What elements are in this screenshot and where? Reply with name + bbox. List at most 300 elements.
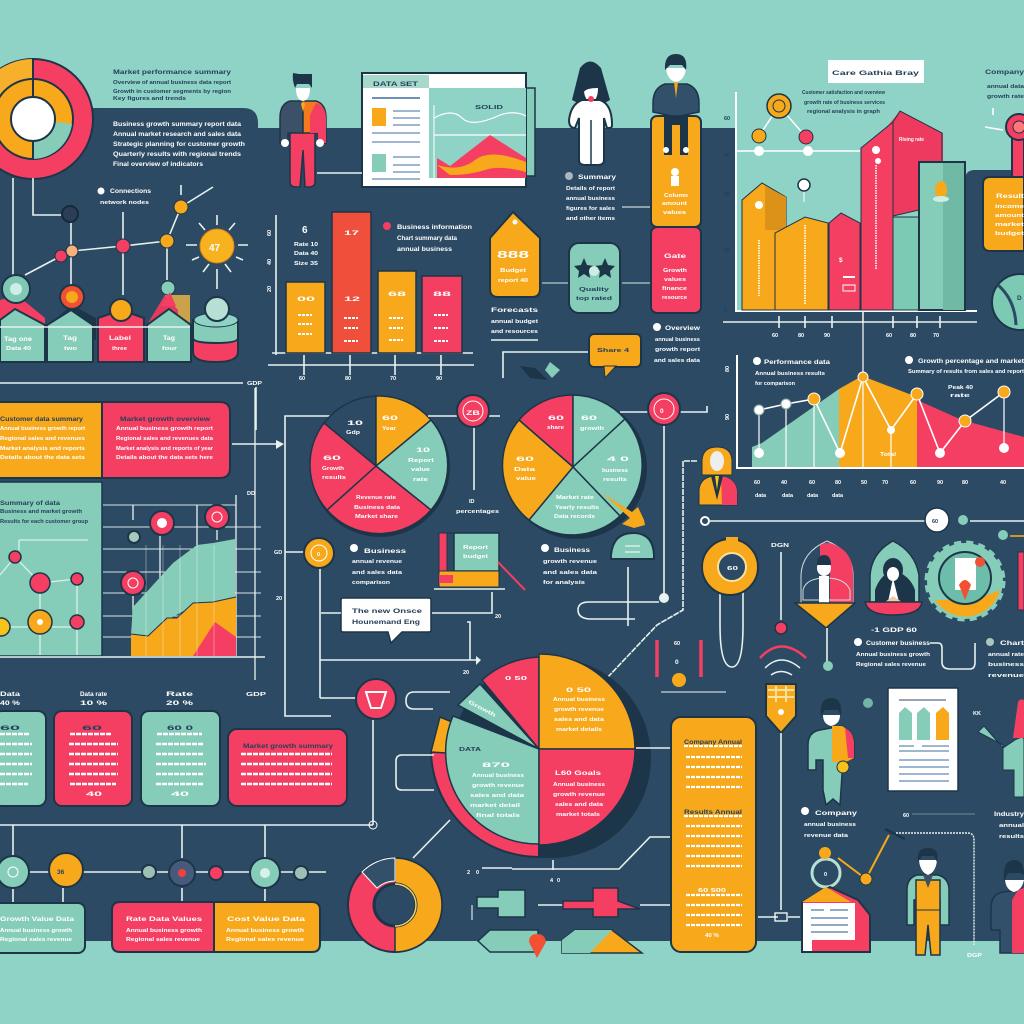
column with seated man: Column (664, 193, 689, 199)
connector and amber node: 20 (463, 670, 469, 676)
cards row: 60 (82, 725, 103, 732)
right top text and pin (985, 69, 1024, 180)
text: person captions: Industry (994, 811, 1024, 818)
cards row: Market growth summary (243, 743, 333, 750)
pink bars with amber figure: 0 (675, 659, 679, 666)
connector: pink badge 1: ZB (466, 410, 480, 417)
text below pie 1 (350, 544, 407, 586)
tag: amber label (490, 212, 540, 297)
text: person captions: annual (999, 823, 1024, 829)
line chart: right: 60 (754, 480, 760, 486)
pie chart 1 (285, 396, 450, 716)
line chart: right: 70 (882, 480, 888, 486)
person: red trousers (280, 73, 326, 187)
pie chart 2: Data records (554, 514, 595, 520)
connector and amber node: 0 (317, 552, 320, 558)
line chart: right: data (807, 493, 819, 499)
panel: bottom mint: Regional sales revenue (0, 937, 72, 943)
pie chart 2: Market rate (556, 495, 594, 501)
banner: amber and pink: Annual business growth report (0, 426, 85, 432)
portrait card 1 (795, 541, 855, 671)
pie chart 2: Yearly results (555, 505, 599, 511)
outline connectors around large pie (396, 748, 670, 884)
area chart with grid: DD (247, 491, 255, 497)
pie chart 2: 4 0 (607, 456, 630, 463)
speech bubble: amber note (503, 334, 641, 380)
amber panel right: income (995, 204, 1024, 210)
text: portrait captions: business (988, 662, 1024, 668)
cards row: 10 % (80, 700, 107, 707)
pie chart 1: value (411, 467, 430, 473)
row of house-shaped cards: Tag (63, 335, 77, 342)
bar chart legend (383, 222, 472, 253)
pink bars with amber figure: 60 (674, 641, 680, 647)
large pie chart: 0 50 (505, 676, 527, 682)
outline connectors around large pie: 20 (467, 870, 479, 876)
text block beside column: Summary (578, 174, 616, 181)
pie chart 2: 60 (548, 415, 565, 422)
bar chart: centre-top: 80 (345, 376, 351, 382)
text: person captions: results (999, 834, 1024, 840)
area chart with grid (0, 388, 265, 680)
bar chart: centre-top: Rate 10 (294, 242, 318, 248)
icon: amber ring with stem: 60 (727, 566, 738, 572)
large pie chart: Annual business (553, 782, 605, 788)
bar chart: centre-top: 20 (267, 286, 273, 292)
right top text and pin: Company (985, 69, 1024, 76)
panel: top-left speech bubble (80, 108, 258, 183)
text below pie 2: growth revenue (543, 559, 597, 565)
line chart: right (725, 322, 1024, 499)
dashed connector (607, 461, 697, 678)
title label: Care Gathia Bray (832, 70, 920, 77)
bar chart: centre-top: 68 (388, 291, 407, 298)
area-bar chart: top right: 60 (724, 116, 730, 122)
bar chart: centre-top: 70 (390, 376, 396, 382)
panel: tall amber: 40 % (705, 933, 719, 939)
bar chart: centre-top: 88 (433, 291, 452, 298)
right top text and pin: growth rate (987, 94, 1024, 100)
line chart: right: 90 (725, 414, 731, 420)
banner: amber and pink: Market growth overview (120, 416, 211, 423)
area-bar chart: top right (723, 92, 977, 339)
panel: top-left speech bubble: Strategic planning for customer growth (113, 141, 245, 148)
person: right edge mint (973, 699, 1024, 797)
panel: bottom mint (0, 903, 85, 953)
column with seated man: amount (662, 201, 687, 207)
text below pie 1: annual revenue (352, 559, 402, 565)
amber panel right (983, 177, 1024, 251)
pie chart 1: 10 (416, 447, 431, 454)
bar chart: centre-top: 00 (297, 296, 316, 303)
line chart legend: Summary of results from sales and report (908, 369, 1024, 375)
cards row: 60 (0, 725, 21, 732)
divider line with label: GDP (247, 381, 262, 387)
heading: top-left text: Overview of annual business data report (113, 80, 231, 86)
line chart: right: 80 (725, 366, 731, 372)
banner: amber and pink (0, 402, 230, 478)
panel: bottom pink and amber: Cost Value Data (227, 916, 306, 923)
panel: top-left speech bubble: Business growth summary report data (113, 121, 241, 128)
person: right edge mint: KK (973, 711, 981, 717)
large pie chart: sales and data (555, 802, 604, 808)
text: portrait captions: Regional sales revenue (856, 662, 926, 668)
text under title: growth rate of business services (804, 100, 885, 106)
text below pie 2: and sales data (543, 570, 598, 576)
timeline bar (701, 508, 1024, 540)
large pie chart: 870 (482, 762, 511, 769)
connector and amber node: 20 (276, 596, 282, 602)
bar chart legend: Business information (397, 224, 472, 231)
network lines and nodes (13, 178, 213, 300)
area-bar chart: top right: 0 (724, 308, 727, 314)
pie chart 1: results (322, 475, 346, 481)
tag: amber label: report 40 (498, 278, 528, 284)
text below pie 1: Business (364, 548, 407, 555)
document with bars (888, 688, 958, 791)
line chart: right: 60 (809, 480, 815, 486)
line chart: right: 80 (835, 480, 841, 486)
amber panel right: market (995, 222, 1024, 228)
bar chart: centre-top: 12 (344, 296, 361, 303)
area-bar chart: top right: 60 (772, 333, 778, 339)
area-bar chart: top right: $ (839, 257, 843, 264)
donut chart: top-left (0, 59, 93, 179)
line chart legend: Performance data (764, 359, 830, 366)
icon: amber ring with stem (702, 537, 789, 667)
text below pie 1: and sales data (352, 570, 403, 576)
connector: pink badge 1: percentages (456, 509, 499, 515)
column with seated man: Growth (663, 268, 688, 274)
large pie chart: sales and data (554, 717, 605, 723)
panel: mint network: Summary of data (0, 500, 60, 507)
pie chart 1: rate (413, 477, 428, 483)
panel: report document with chart (362, 73, 535, 187)
tag: amber label: 888 (497, 250, 530, 261)
text: person captions: Company (815, 810, 858, 817)
line chart legend: Annual business results (755, 371, 825, 377)
large pie chart: market totals (556, 812, 600, 818)
line chart: right: data (782, 493, 794, 499)
row of house-shaped cards: Tag (163, 335, 175, 342)
icon: book: budget (463, 554, 488, 560)
cards row: 40 (86, 791, 103, 798)
panel: bottom pink and amber: Regional sales revenue (126, 937, 200, 943)
speech bubble: amber note: Share 4 (597, 348, 631, 354)
text below pie 2 (541, 544, 598, 586)
area-bar chart: top right: 70 (933, 333, 939, 339)
title label (828, 60, 924, 83)
arrow to pie (232, 440, 284, 449)
text right of bubble: and sales data (654, 358, 701, 364)
text block beside column (565, 172, 650, 222)
banner: amber and pink: Customer data summary (0, 416, 83, 423)
tag: amber label: Budget (500, 268, 526, 274)
line chart: right: 60 (910, 480, 916, 486)
column with seated man: Gate (664, 253, 687, 260)
panel: mint network: Results for each customer group (0, 519, 89, 525)
pie chart 1: Business data (354, 505, 401, 511)
cards row: 40 (171, 791, 190, 798)
amber panel right: Result (996, 193, 1024, 200)
large pie chart: market details (556, 727, 602, 733)
large pie chart: Annual business (472, 773, 524, 779)
timeline bar: 60 (932, 519, 938, 525)
pie chart 2: growth (580, 426, 605, 432)
panel: report document with chart: SOLID (475, 105, 503, 111)
panel: bottom pink and amber: Regional sales revenue (226, 937, 304, 943)
person: dark jacket (991, 860, 1024, 953)
text: portrait captions: Customer business (866, 640, 930, 647)
panel: mint network (0, 482, 102, 656)
amber network with lens: DGP (967, 953, 982, 959)
network lines and nodes: Connections (110, 188, 151, 195)
icon: book: Report (463, 545, 488, 551)
connector: pink badge 2: 0 (660, 408, 664, 415)
large pie chart: growth revenue (472, 783, 524, 789)
banner: amber and pink: Annual business growth report (116, 426, 213, 432)
person: small portrait (699, 447, 737, 505)
text: portrait captions (854, 627, 1024, 679)
person: mint outfit (808, 698, 873, 805)
pie chart 1: Growth (322, 466, 345, 472)
pink badge with T (320, 679, 450, 825)
panel: bottom pink and amber: Annual business growth (126, 928, 203, 934)
timeline nodes (0, 853, 308, 888)
right top text and pin: annual data (987, 84, 1024, 90)
pink bars with amber figure (657, 640, 701, 687)
text block beside column: and other items (566, 216, 615, 222)
pie chart 1: Report (408, 458, 434, 464)
large pie chart: DATA (459, 747, 481, 753)
bar chart: centre-top (267, 212, 474, 382)
column with seated man: resource (662, 295, 687, 301)
pie chart 1: 10 (347, 420, 364, 427)
banner: amber and pink: Details about the data sets here (116, 455, 213, 461)
cards row: 20 % (166, 700, 193, 707)
cards row: Data (0, 691, 21, 698)
column with seated man: values (663, 210, 686, 216)
document with envelope roof (802, 887, 870, 952)
amber network with lens (812, 829, 982, 959)
bar chart: centre-top: Size 35 (294, 261, 318, 267)
text below tag: and resources (491, 329, 538, 335)
panel: bottom pink and amber: Annual business growth (226, 928, 305, 934)
large pie chart: 0 50 (566, 687, 592, 694)
pie chart 2: results (603, 477, 627, 483)
pie chart 2: 60 (581, 415, 598, 422)
badge: stars: Quality (579, 287, 610, 293)
panel: top-left speech bubble: Annual market research and sales data (113, 131, 241, 138)
column with seated man: values (664, 277, 686, 283)
row of house-shaped cards: Label (109, 335, 131, 342)
bar chart: centre-top: 40 (267, 259, 273, 265)
pie chart 2: Data (514, 467, 537, 473)
area-bar chart: top right: 60 (886, 333, 892, 339)
cards row: Data rate (80, 691, 107, 698)
row of house-shaped cards: three (112, 346, 127, 352)
icon: amber ring with stem: DGN (771, 543, 789, 549)
text under title: regional analysis in graph (807, 109, 881, 115)
text below pie 2: Business (554, 547, 590, 554)
text: portrait captions: Annual business growth (856, 652, 931, 658)
person: woman in white (569, 62, 612, 165)
line chart: right: 40 (781, 480, 787, 486)
text: portrait captions: Chart (1000, 640, 1024, 647)
pie chart 2: business (602, 468, 628, 474)
connector lines: bottom (0, 821, 377, 903)
icon: gear (927, 543, 1003, 619)
text under title: Customer satisfaction and overview (802, 90, 886, 96)
line chart: right: data (755, 493, 767, 499)
pie chart 1: Gdp (346, 430, 361, 436)
line chart: right: 50 (861, 480, 867, 486)
panel: bottom mint: Growth Value Data (0, 916, 74, 923)
text right of bubble: Overview (665, 325, 701, 332)
callout with note: The new Onsce (352, 608, 423, 615)
donut chart: bottom (348, 820, 450, 952)
text: portrait captions: annual rate (988, 652, 1024, 658)
bar chart legend: Chart summary data (397, 235, 457, 242)
connector: pink badge 1 (428, 395, 500, 515)
cards row: GDP (246, 692, 267, 698)
text block beside column: annual business (566, 196, 615, 202)
icon: stacked cylinder (193, 297, 238, 362)
globe: D (1017, 295, 1022, 302)
cards row: Rate (166, 691, 194, 698)
bar chart: centre-top: 60 (299, 376, 305, 382)
line chart legend: Growth percentage and market (918, 358, 1024, 365)
right edge pink fragment (1018, 552, 1024, 610)
area-bar chart: top right: 20 (724, 248, 730, 254)
banner: amber and pink: Details about the data sets (0, 455, 85, 461)
text below tag (491, 307, 539, 340)
large pie chart: Annual business (553, 697, 605, 703)
icon: shield (661, 646, 806, 921)
line chart: right: Peak 40 (948, 385, 973, 391)
pie chart 2: value (516, 476, 536, 482)
large pie chart: Growth (467, 699, 497, 719)
callout with note: Hounemand Eng (352, 619, 420, 626)
cards row: 40 % (0, 700, 20, 707)
network lines and nodes: network nodes (100, 200, 149, 206)
text: person captions (801, 807, 1024, 840)
banner: amber and pink: Regional sales and revenues (0, 436, 85, 442)
panel: bottom pink and amber (112, 902, 320, 952)
line chart: right: data (832, 493, 844, 499)
icon: light bulb: 47 (209, 243, 221, 254)
line chart legend: for comparison (755, 381, 796, 387)
line chart: right: 90 (937, 480, 943, 486)
connector and amber node (274, 538, 501, 698)
connector: pink badge 1: ID (469, 499, 475, 505)
panel: report document with chart: DATA SET (373, 81, 418, 88)
panel: tall amber: Company Annual (684, 739, 742, 746)
text: person captions: annual business (804, 822, 856, 828)
cards row: 60 0 (167, 725, 194, 732)
area-bar chart: top right: Rising rate (899, 137, 924, 143)
panel: mint network: Business and market growth (0, 509, 83, 515)
heading: top-left text: Market performance summary (113, 69, 231, 76)
bar chart: centre-top: Data 40 (294, 251, 318, 257)
pie chart 2: 60 (516, 456, 535, 463)
connector: pink badge 2 (578, 393, 707, 626)
row of house-shaped cards: Data 40 (6, 346, 31, 352)
bar chart: centre-top: 60 (267, 230, 273, 236)
panel: top-left speech bubble: Quarterly results with regional trends (113, 151, 241, 158)
cards row (0, 691, 347, 806)
connector and amber node: GD (274, 550, 282, 556)
panel: tall amber: Results Annual (684, 809, 742, 816)
banner: amber and pink: Market analysis and reports (0, 446, 85, 452)
text: person captions: 60 (903, 813, 909, 819)
pie chart 2 (502, 395, 647, 539)
panel: tall amber (671, 717, 756, 952)
text right of bubble: growth report (655, 347, 700, 353)
text right of bubble (653, 323, 701, 364)
icon: light bulb (186, 215, 248, 289)
area-bar chart: top right: 80 (798, 333, 804, 339)
divider line with label (0, 381, 262, 430)
panel: bottom pink and amber: Rate Data Values (126, 916, 203, 923)
bar chart: centre-top: 17 (344, 230, 360, 237)
row of house-shaped cards (0, 275, 191, 362)
large pie chart (431, 654, 651, 858)
connector and amber node: 20 (495, 614, 501, 620)
text: portrait captions: -1 GDP 60 (871, 627, 918, 634)
text block beside column: Details of report (566, 186, 615, 192)
line chart: right: rate (950, 393, 970, 399)
pie chart 1: Year (382, 426, 397, 432)
bar chart: centre-top: 90 (436, 376, 442, 382)
heading: top-left text: Growth in customer segments by region (113, 89, 232, 95)
pie chart 1: 60 (382, 415, 399, 422)
text right of bubble: annual business (655, 337, 700, 343)
line chart: right: 80 (962, 480, 968, 486)
column with seated man (651, 54, 701, 313)
bar chart legend: annual business (397, 246, 452, 253)
line chart: right: Total (880, 452, 897, 458)
bar chart: centre-top: 6 (302, 225, 308, 236)
text below tag: annual budget (491, 319, 538, 325)
outline connectors around large pie: 40 (550, 878, 560, 884)
person: amber overalls (907, 848, 949, 955)
amber panel right: budget (995, 231, 1024, 237)
heading: top-left text: Key figures and trends (113, 96, 186, 102)
area-bar chart: top right: 30 (724, 192, 730, 198)
amber panel right: amount (995, 213, 1024, 219)
pie chart 1: 60 (323, 455, 342, 462)
banner: amber and pink: Market analysis and reports of year (116, 446, 214, 452)
area-bar chart: top right: 40 (724, 153, 730, 159)
panel: top-left speech bubble: Final overview of indicators (113, 161, 203, 168)
area-bar chart: top right: 90 (824, 333, 830, 339)
line chart legend (753, 356, 1024, 387)
row of house-shaped cards: four (162, 346, 178, 352)
large pie chart: growth revenue (554, 707, 604, 713)
row of house-shaped cards: two (64, 346, 78, 352)
column with seated man: finance (662, 286, 687, 292)
badge: stars (542, 243, 650, 313)
large pie chart: final totals (476, 813, 520, 819)
portrait card 2 (865, 541, 922, 615)
pie chart 2: share (547, 425, 564, 431)
amber network with lens: 0 (824, 872, 827, 878)
panel: bottom mint: Annual business growth (0, 928, 73, 934)
text below tag: Forecasts (491, 307, 539, 314)
text below pie 2: for analysis (543, 580, 585, 586)
connector (317, 172, 362, 174)
